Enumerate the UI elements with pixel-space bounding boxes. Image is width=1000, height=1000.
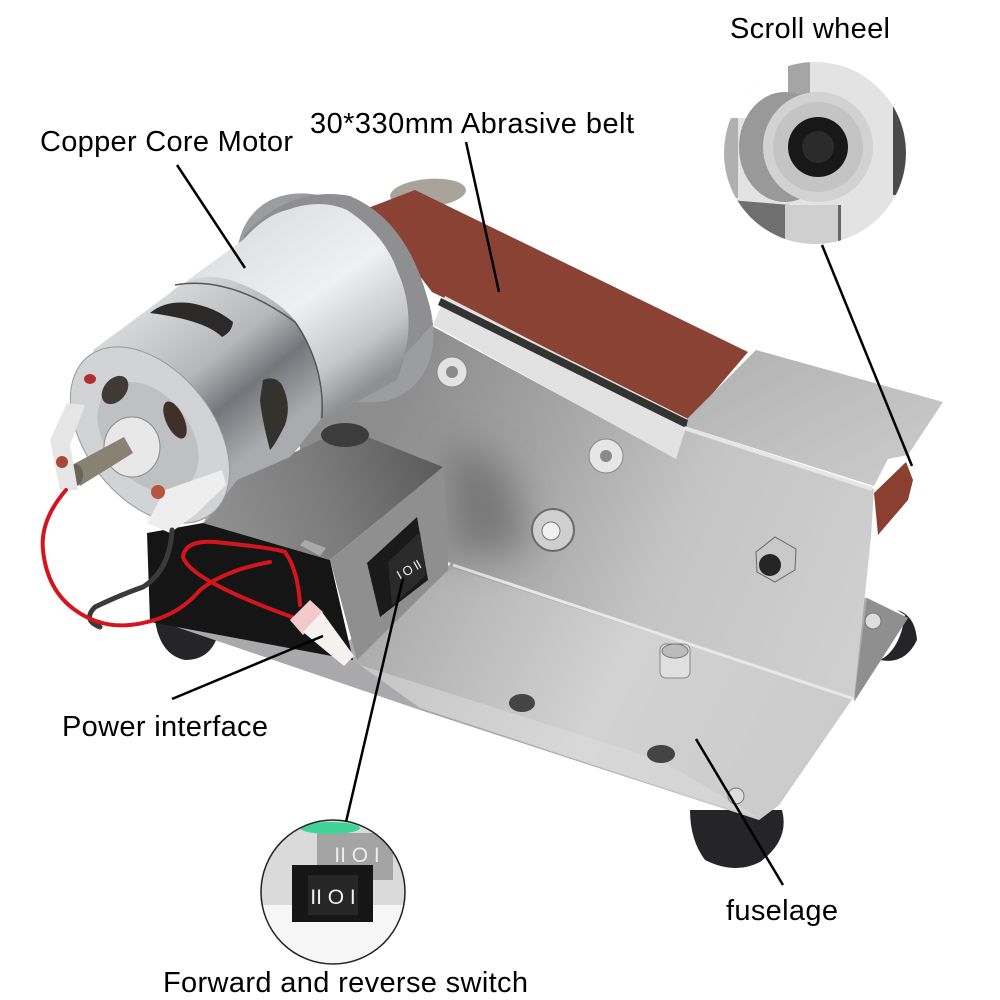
machine photo xyxy=(38,155,943,868)
base right corner xyxy=(854,598,908,702)
arrow: fuselage xyxy=(696,739,783,885)
transparent terminals xyxy=(50,403,85,490)
plate shadow xyxy=(450,440,530,555)
black wire xyxy=(90,530,172,627)
fold highlight xyxy=(453,565,854,699)
inset: switch: II O I xyxy=(310,886,356,909)
guard highlight xyxy=(684,428,872,489)
label: scroll wheel: Scroll wheel xyxy=(730,13,890,45)
base plate bright front xyxy=(360,665,759,818)
inset: switch: II O I xyxy=(334,844,380,867)
belt guard top xyxy=(681,350,943,486)
base holes xyxy=(509,694,675,763)
switch box xyxy=(147,423,448,660)
guide strip xyxy=(433,296,688,459)
callout lines xyxy=(172,142,912,885)
label: copper core motor: Copper Core Motor xyxy=(40,126,293,158)
wires xyxy=(43,490,300,627)
label: power interface: Power interface xyxy=(62,711,268,743)
upright plate xyxy=(300,325,874,699)
power connector xyxy=(290,600,354,666)
inset: scroll wheel xyxy=(724,62,906,244)
switch box: I O II xyxy=(394,557,424,583)
label: forward and reverse switch: Forward and reverse switch xyxy=(163,967,528,999)
red wires xyxy=(43,490,270,625)
arrow: power interface xyxy=(172,636,323,699)
label: fuselage: fuselage xyxy=(726,895,838,927)
arrow: copper core motor xyxy=(177,165,245,268)
inset: switch xyxy=(260,820,410,965)
screws xyxy=(437,357,881,804)
rubber feet xyxy=(155,610,917,868)
arrow: abrasive belt xyxy=(466,142,499,292)
abrasive belt xyxy=(368,176,913,535)
label: abrasive belt: 30*330mm Abrasive belt xyxy=(310,108,634,140)
arrow: switch xyxy=(346,578,403,822)
motor end plate xyxy=(38,317,262,553)
arrow: scroll wheel xyxy=(822,245,912,466)
motor xyxy=(38,155,474,553)
base plate xyxy=(150,562,908,820)
